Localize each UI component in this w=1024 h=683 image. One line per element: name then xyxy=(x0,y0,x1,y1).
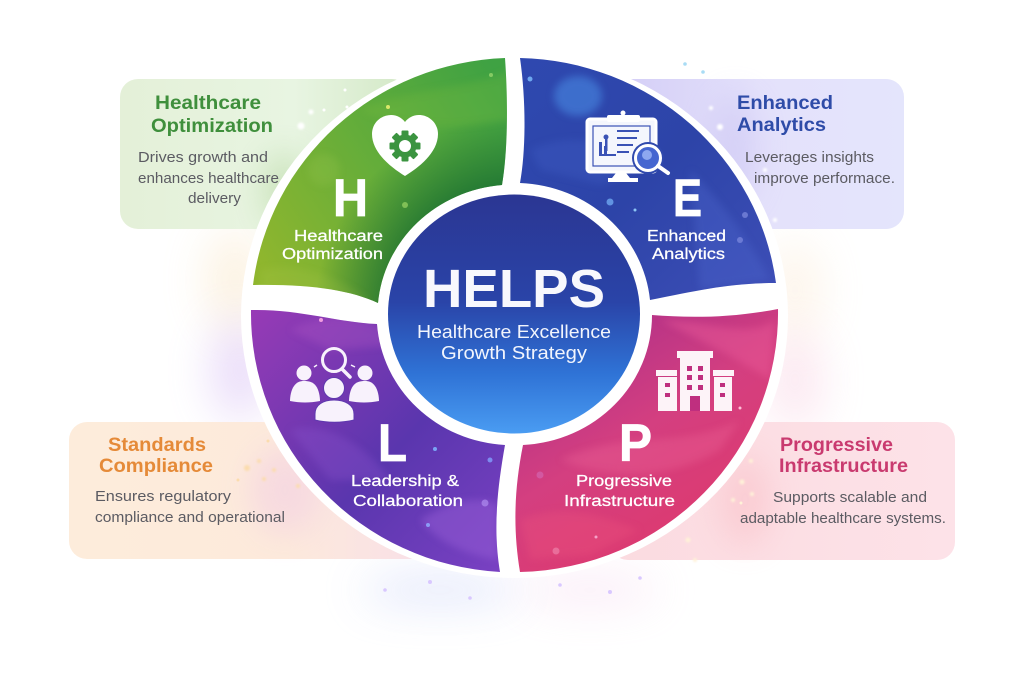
panel text: Progressive Infrastructure: Supports scalable and xyxy=(773,490,927,506)
segment: E blue xyxy=(520,58,776,300)
panel text: Progressive Infrastructure: Infrastructure xyxy=(779,456,908,477)
panel text: Healthcare Optimization xyxy=(138,93,279,207)
center circle ring xyxy=(378,185,650,443)
panel shading near wheel xyxy=(250,95,770,545)
letter E and label: E xyxy=(673,169,702,228)
letter P and label: Infrastructure xyxy=(564,493,675,510)
letter L and label: L xyxy=(378,414,407,473)
segment: P pink xyxy=(512,305,784,577)
letter H and label: H xyxy=(333,169,368,228)
letter E and label: Enhanced xyxy=(647,228,726,245)
panel: Healthcare Optimization background xyxy=(120,79,410,229)
segment: H green xyxy=(253,58,507,303)
panel text: Progressive Infrastructure: Progressive xyxy=(780,435,893,456)
panel text: Healthcare Optimization: Optimization xyxy=(151,116,273,137)
panel: Standards Compliance background xyxy=(69,422,429,559)
center title: Healthcare Excellence xyxy=(417,322,611,342)
panel text: Enhanced Analytics: Enhanced xyxy=(737,93,833,114)
letter H and label: Optimization xyxy=(282,246,383,263)
background glow xyxy=(207,230,820,604)
panel text: Standards Compliance: Standards xyxy=(108,435,206,456)
letter H and label xyxy=(282,169,383,263)
panel text: Healthcare Optimization: delivery xyxy=(188,191,242,207)
segment: L purple xyxy=(245,305,510,577)
panel text: Standards Compliance xyxy=(95,435,285,526)
icon: heart with gear xyxy=(372,115,438,176)
panel text: Enhanced Analytics xyxy=(737,93,895,187)
center title: Growth Strategy xyxy=(441,343,587,363)
panel text: Enhanced Analytics: Analytics xyxy=(737,115,826,136)
panel text: Standards Compliance: compliance and operational xyxy=(95,510,285,526)
panel text: Healthcare Optimization: Healthcare xyxy=(155,93,261,114)
letter E and label: Analytics xyxy=(652,246,725,263)
icon: monitor with magnifier xyxy=(587,110,668,182)
letter P and label xyxy=(564,414,675,510)
panel text: Progressive Infrastructure xyxy=(740,435,946,527)
center title: HELPS xyxy=(423,259,605,319)
wheel base xyxy=(241,54,788,578)
panel text: Healthcare Optimization: Drives growth and xyxy=(138,150,268,166)
letter P and label: P xyxy=(619,414,652,473)
center circle xyxy=(388,194,640,434)
panel text: Standards Compliance: Compliance xyxy=(99,456,213,477)
panel text: Standards Compliance: Ensures regulatory xyxy=(95,489,232,505)
letter P and label: Progressive xyxy=(576,473,672,490)
letter H and label: Healthcare xyxy=(294,228,383,245)
icon: team with magnifier xyxy=(290,348,379,422)
center title xyxy=(417,259,611,363)
letter E and label xyxy=(647,169,726,263)
panel: Progressive Infrastructure background xyxy=(610,422,955,560)
sparkles xyxy=(236,62,777,600)
icon: hospital building xyxy=(656,351,734,411)
letter L and label xyxy=(351,414,463,510)
panel text: Enhanced Analytics: Leverages insights xyxy=(745,150,874,166)
panel text: Enhanced Analytics: improve performace. xyxy=(754,171,895,187)
letter L and label: Leadership & xyxy=(351,473,460,490)
panel: Enhanced Analytics background xyxy=(614,79,904,229)
letter L and label: Collaboration xyxy=(353,493,463,510)
panel text: Healthcare Optimization: enhances healthcare xyxy=(138,171,279,187)
panel text: Progressive Infrastructure: adaptable healthcare systems. xyxy=(740,511,946,527)
